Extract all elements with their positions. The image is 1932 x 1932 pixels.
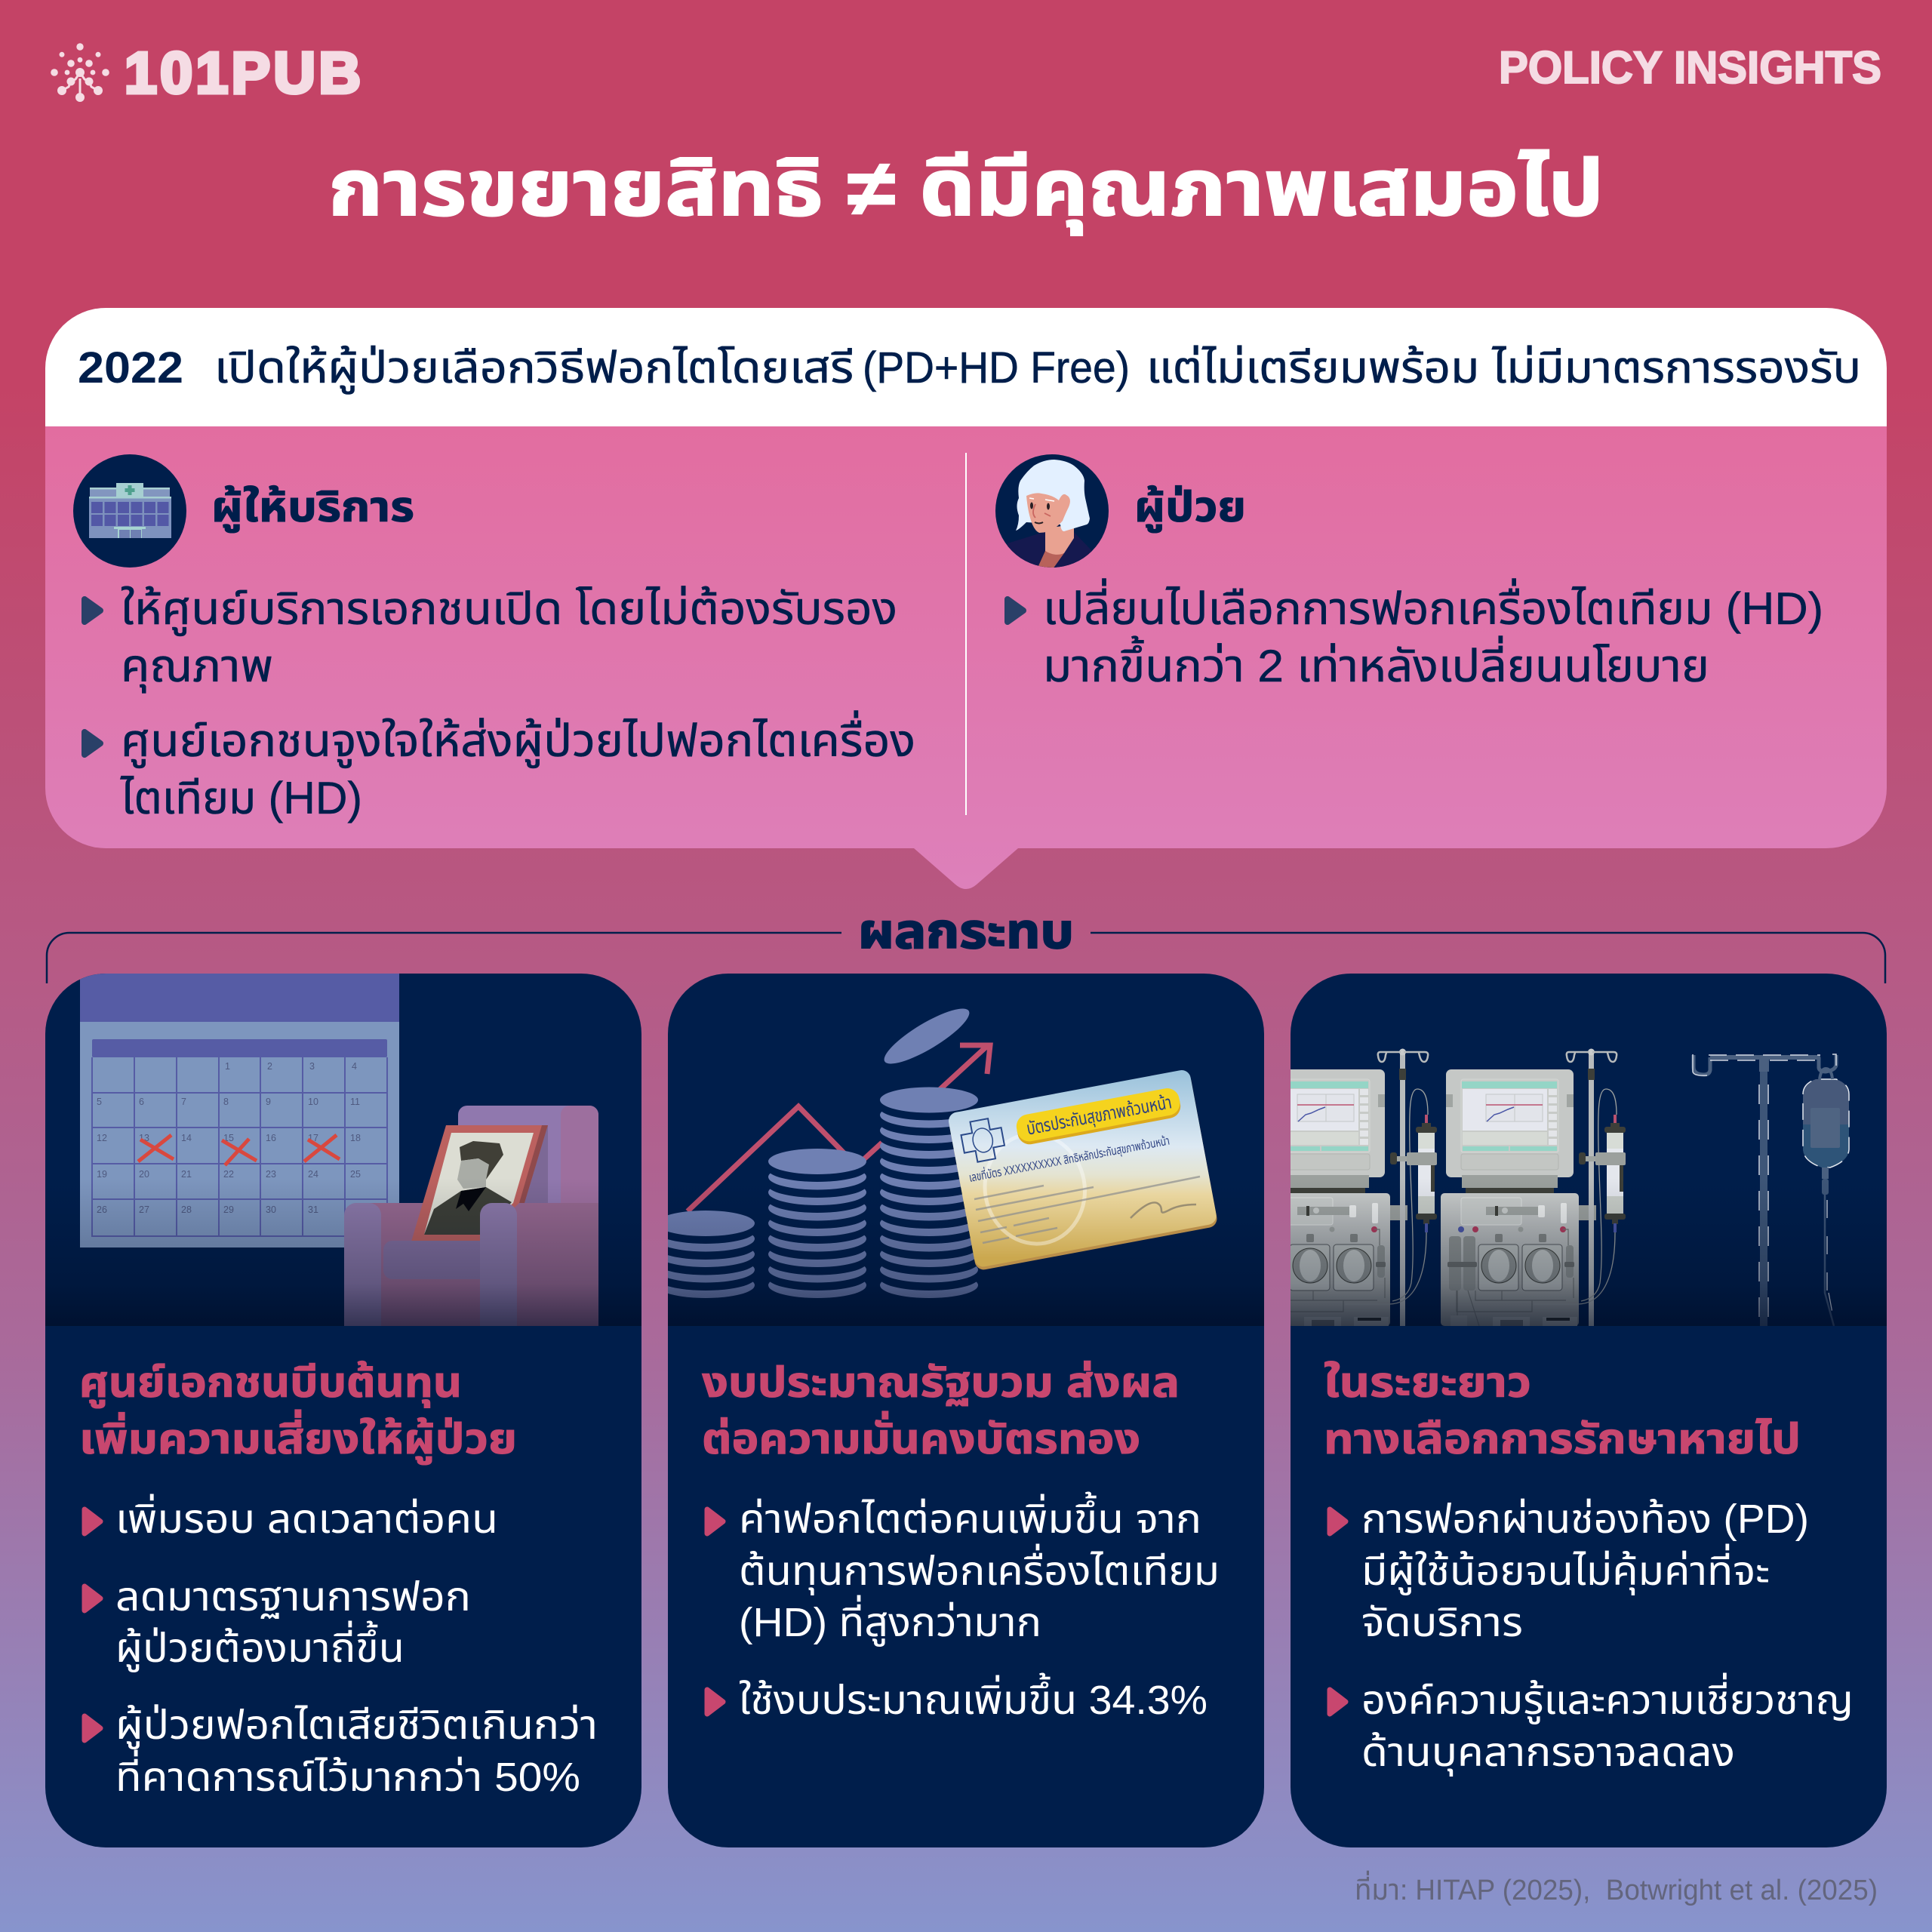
card 2 heading xyxy=(702,1358,1180,1463)
card 1 bullet 3: ที่คาดการณ์ไว้มากกว่า 50% xyxy=(115,1749,580,1800)
calendar: 18 xyxy=(350,1133,361,1143)
card 1 heading: ศูนย์เอกชนบีบต้นทุน xyxy=(79,1358,462,1408)
section heading: impacts with bracket: ผลกระทบ xyxy=(858,904,1074,958)
calendar: 7 xyxy=(181,1097,186,1107)
calendar: 27 xyxy=(139,1204,149,1215)
header year: 2022 xyxy=(78,343,183,392)
card 1 bullet 2 xyxy=(85,1574,471,1672)
bullet: providers 2 xyxy=(85,710,915,823)
card 2 bullet 2: ใช้งบประมาณเพิ่มขึ้น 34.3% xyxy=(739,1672,1208,1723)
panel: card 2 state budget xyxy=(656,974,1264,1847)
card 3 bullet 1: จัดบริการ xyxy=(1361,1600,1523,1645)
header statement xyxy=(214,343,1861,394)
card 2 bullet 1: ต้นทุนการฟอกเครื่องไตเทียม xyxy=(739,1543,1220,1595)
calendar: 1 xyxy=(225,1061,230,1072)
heading: providers: ผู้ให้บริการ xyxy=(211,483,414,533)
health insurance gold card: บัตรประกันสุขภาพถ้วนหน้า xyxy=(1025,1092,1174,1140)
card 3 heading: ในระยะยาว xyxy=(1324,1358,1531,1406)
illustration: coins and gold card xyxy=(656,1000,990,1298)
card 1 bullet 3: ผู้ป่วยฟอกไตเสียชีวิตเกินกว่า xyxy=(115,1703,598,1749)
panel header xyxy=(45,308,1887,426)
bullet: providers 1 xyxy=(85,583,897,694)
calendar: 28 xyxy=(181,1204,192,1215)
rising arrow xyxy=(688,1045,990,1211)
calendar: 9 xyxy=(266,1097,271,1107)
card 1 bullet 3 xyxy=(85,1703,598,1800)
card 2 bullet 1: ค่าฟอกไตต่อคนเพิ่มขึ้น จาก xyxy=(739,1491,1201,1542)
calendar: 21 xyxy=(181,1169,192,1180)
calendar: 16 xyxy=(266,1133,276,1143)
calendar: 10 xyxy=(308,1097,318,1107)
calendar: 5 xyxy=(97,1097,102,1107)
card 3 bullet 1: การฟอกผ่านช่องท้อง (PD) xyxy=(1361,1497,1809,1542)
bullet: patients xyxy=(1008,578,1823,691)
heading: patients: ผู้ป่วย xyxy=(1134,483,1246,533)
calendar: 2 xyxy=(267,1061,272,1072)
icon: patient xyxy=(995,454,1109,568)
calendar: 17 xyxy=(308,1133,318,1143)
card 2 heading: งบประมาณรัฐบวม ส่งผล xyxy=(702,1358,1180,1406)
logo: 101PUB xyxy=(51,41,361,106)
panel: card 3 long-term options xyxy=(1252,974,1887,1847)
card 1 bullet 2: ผู้ป่วยต้องมาถี่ขึ้น xyxy=(115,1620,405,1672)
icon: hospital xyxy=(73,454,186,568)
card 3 bullet 1 xyxy=(1330,1497,1809,1645)
calendar: 23 xyxy=(266,1169,276,1180)
title: การขยายสิทธิ ≠ ดีมีคุณภาพเสมอไป xyxy=(328,145,1604,235)
card 3 heading xyxy=(1324,1358,1801,1463)
card 1 heading xyxy=(79,1358,517,1465)
coin stacks xyxy=(656,1087,979,1298)
calendar: 8 xyxy=(223,1097,229,1107)
header statement: แต่ไม่เตรียมพร้อม ไม่มีมาตรการรองรับ xyxy=(1146,343,1861,392)
label: POLICY INSIGHTS: POLICY INSIGHTS xyxy=(1499,42,1881,93)
calendar: 11 xyxy=(350,1097,360,1107)
panel: card 1 private centres xyxy=(45,974,641,1847)
card 3 bullet 2: ด้านบุคลากรอาจลดลง xyxy=(1361,1730,1735,1777)
calendar: 31 xyxy=(308,1204,318,1215)
section heading: impacts with bracket xyxy=(47,904,1885,983)
header statement: เปิดให้ผู้ป่วยเลือกวิธีฟอกไตโดยเสรี xyxy=(214,343,854,394)
bullet: providers 1: ให้ศูนย์บริการเอกชนเปิด โดยไม่ต้องรับรอง xyxy=(121,583,897,636)
column: patients xyxy=(995,454,1823,691)
calendar: 15 xyxy=(223,1133,234,1143)
bullet: providers 2: ไตเทียม (HD) xyxy=(120,773,362,823)
calendar: 19 xyxy=(97,1169,107,1180)
card 1 bullet 1: เพิ่มรอบ ลดเวลาต่อคน xyxy=(115,1494,498,1542)
card 3 bullet 2 xyxy=(1330,1672,1854,1777)
header statement: (PD+HD Free) xyxy=(863,343,1130,392)
dialysis machine right xyxy=(1441,1049,1626,1326)
calendar: 24 xyxy=(308,1169,318,1180)
icon: logo network xyxy=(51,43,109,102)
card 2 heading: ต่อความมั่นคงบัตรทอง xyxy=(702,1411,1140,1463)
calendar: 3 xyxy=(309,1061,315,1072)
falling coin xyxy=(884,1008,969,1064)
calendar: 12 xyxy=(97,1133,107,1143)
panel body with pointer xyxy=(45,426,1887,889)
calendar: 20 xyxy=(139,1169,149,1180)
calendar: 4 xyxy=(352,1061,357,1072)
card 1 heading: เพิ่มความเสี่ยงให้ผู้ป่วย xyxy=(79,1409,517,1465)
IV stand and bag xyxy=(1693,1054,1849,1326)
card 3 bullet 1: มีผู้ใช้น้อยจนไม่คุ้มค่าที่จะ xyxy=(1361,1543,1770,1595)
column: providers xyxy=(73,454,915,823)
card 3 heading: ทางเลือกการรักษาหายไป xyxy=(1324,1415,1801,1463)
calendar xyxy=(80,974,399,1247)
calendar: 26 xyxy=(97,1204,107,1215)
calendar: 14 xyxy=(181,1133,192,1143)
calendar: 29 xyxy=(223,1204,234,1215)
calendar: 30 xyxy=(266,1204,276,1215)
source note: ที่มา: HITAP (2025), Botwright et al. (2025) xyxy=(1355,1870,1878,1906)
bullet: providers 2: ศูนย์เอกชนจูงใจให้ส่งผู้ป่วยไปฟอกไตเครื่อง xyxy=(121,710,915,768)
calendar: 6 xyxy=(139,1097,144,1107)
calendar: 22 xyxy=(223,1169,234,1180)
health insurance gold card xyxy=(947,1069,1218,1271)
armchair with framed portrait xyxy=(344,1106,598,1326)
bullet: patients: มากขึ้นกว่า 2 เท่าหลังเปลี่ยนนโยบาย xyxy=(1043,635,1709,691)
bullet: patients: เปลี่ยนไปเลือกการฟอกเครื่องไตเทียม (HD) xyxy=(1043,578,1823,634)
bullet: providers 1: คุณภาพ xyxy=(121,641,273,694)
health insurance gold card: เลขที่บัตร XXXXXXXXXX สิทธิหลักประกันสุขภาพถ้วนหน้า xyxy=(968,1132,1171,1185)
calendar: 25 xyxy=(350,1169,361,1180)
card 2 bullet 1 xyxy=(707,1491,1220,1647)
dialysis machine left xyxy=(1291,1049,1437,1326)
card 3 bullet 2: องค์ความรู้และความเชี่ยวชาญ xyxy=(1361,1672,1854,1724)
panel: policy 2022 xyxy=(45,308,1887,889)
card 1 bullet 2: ลดมาตรฐานการฟอก xyxy=(115,1574,471,1620)
card 2 bullet 1: (HD) ที่สูงกว่ามาก xyxy=(739,1595,1041,1647)
wordmark: 101PUB xyxy=(125,41,361,106)
calendar: 13 xyxy=(139,1133,149,1143)
illustration: dialysis machines and IV stand xyxy=(1252,1049,1849,1326)
illustration: calendar and memorial chair xyxy=(80,974,598,1326)
